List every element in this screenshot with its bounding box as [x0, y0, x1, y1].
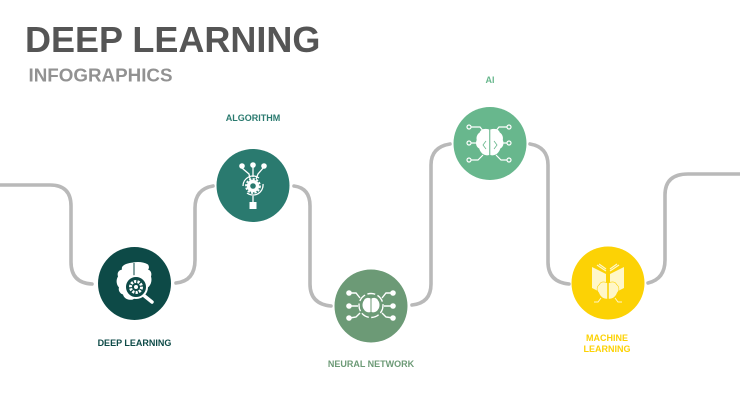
label: machine learning: MACHINE: [586, 333, 628, 343]
icon: brain network: [346, 290, 396, 321]
icon: book with brain: [592, 264, 624, 302]
label: ai: AI: [486, 75, 494, 85]
circle: ai: [454, 107, 526, 180]
step: machine learning: [572, 246, 644, 354]
label: algorithm: ALGORITHM: [226, 113, 280, 123]
circle: deep learning: [98, 247, 171, 320]
icon: brain circuit: [467, 125, 511, 162]
step: algorithm: [216, 113, 290, 222]
step: deep learning: [98, 247, 171, 348]
label: machine learning: [584, 333, 630, 354]
circle: machine learning: [572, 246, 644, 320]
icon: gear with nodes: [239, 162, 267, 209]
connector line: [0, 144, 740, 306]
step: neural network: [328, 270, 415, 369]
circle: neural network: [334, 270, 408, 342]
label: deep learning: DEEP LEARNING: [98, 338, 171, 348]
circle: algorithm: [216, 149, 290, 222]
label: machine learning: LEARNING: [584, 344, 630, 354]
label: neural network: NEURAL NETWORK: [328, 359, 415, 369]
icon: brain with magnifier and gear: [117, 262, 152, 302]
title: DEEP LEARNING: [25, 19, 320, 60]
step: ai: [454, 75, 526, 180]
subtitle: INFOGRAPHICS: [28, 64, 172, 86]
